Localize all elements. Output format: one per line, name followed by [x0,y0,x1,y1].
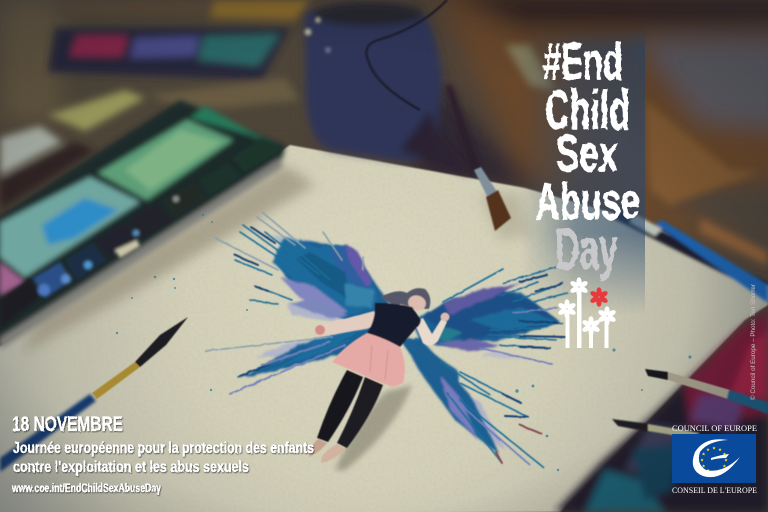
ink rays [205,212,567,467]
web address: www.coe.int/EndChildSexAbuseDay [11,483,161,495]
shadow [335,385,412,470]
title: #End Child Sex Abuse Day: #End [543,33,623,91]
title: #End Child Sex Abuse Day: Abuse [535,173,640,231]
title: #End Child Sex Abuse Day: Sex [556,125,618,183]
neck [398,304,414,314]
Council of Europe logo [672,423,757,495]
title: #End Child Sex Abuse Day: Child [545,78,630,141]
arm left [314,311,376,336]
ink backing [240,240,560,455]
icon: flowers [557,277,617,348]
photo credit: © Council of Europe – Photo: Teri Shorrer [750,284,757,400]
paint brush, lower left [0,317,188,472]
background palette, blurred [0,0,310,210]
caption text, lower left: contre l'exploitation et les abus sexuels [13,459,249,476]
logo flag [672,434,756,483]
date: 18 NOVEMBRE [12,413,123,436]
paint brush, right [645,369,768,414]
arm right [414,318,447,346]
caption text, lower left [11,413,314,495]
face [406,293,428,313]
shirt [367,303,421,347]
title panel backdrop [520,25,645,315]
ink masses [272,237,560,440]
logo label, bottom: CONSEIL DE L'EUROPE [672,485,757,495]
hair [380,288,430,309]
splatter wings [205,212,567,467]
tray paint wells [0,138,282,328]
title: #End Child Sex Abuse Day [535,33,640,282]
skirt [332,333,405,387]
paint brush, lower [612,419,700,438]
paint specks [116,214,692,471]
legs [317,370,363,442]
watercolor tray [0,100,285,350]
girl lying on the paper [309,288,450,470]
event name: Journée européenne pour la protection des enfants [13,440,314,457]
pencils, right side [612,210,768,303]
lower right paint tray [555,310,768,512]
title: #End Child Sex Abuse Day: Day [555,217,618,282]
pale washes [255,235,525,450]
paper sheet [0,145,768,512]
logo label, top: COUNCIL OF EUROPE [672,423,757,433]
flat brush, top centre [445,85,511,231]
feet [309,439,327,457]
ink jar [304,0,470,175]
